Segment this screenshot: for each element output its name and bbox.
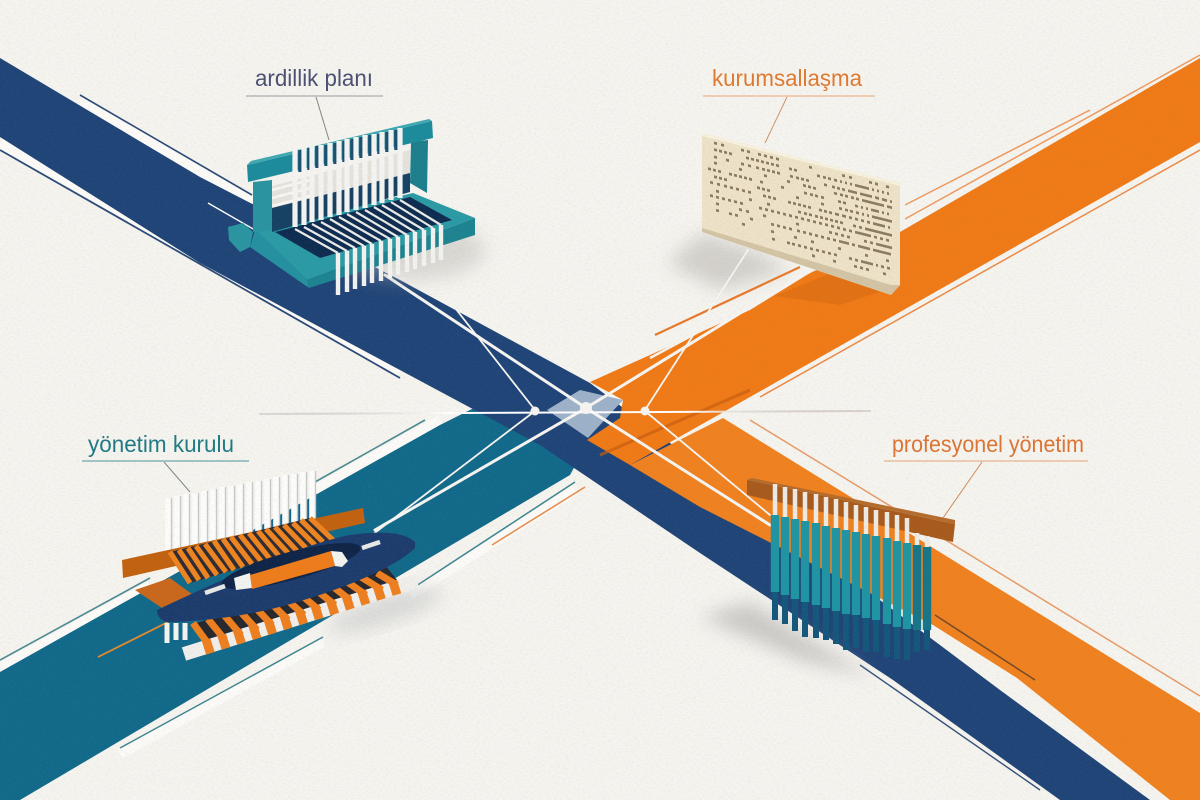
band: orange weft lower [630, 418, 1200, 800]
icon: teal heddle loom [228, 119, 485, 295]
label: profesyonel yönetim [884, 431, 1088, 518]
icon: hanging teal warp comb [700, 478, 955, 677]
label: ardillik planı: ardillik planı [255, 65, 373, 91]
label: yönetim kurulu: yönetim kurulu [88, 431, 234, 457]
band: orange weft upper [587, 55, 1200, 465]
icon: shuttle with orange weft [98, 471, 446, 657]
icon: punched card [702, 133, 900, 295]
shadow: punched card on paper [667, 233, 790, 290]
label: ardillik planı [246, 65, 383, 140]
band: teal warp [0, 395, 600, 800]
label: yönetim kurulu [82, 431, 249, 492]
label: kurumsallaşma: kurumsallaşma [712, 65, 862, 91]
label: kurumsallaşma [703, 65, 875, 143]
threads converging at the centre [260, 250, 870, 535]
label: profesyonel yönetim: profesyonel yönetim [892, 431, 1084, 457]
